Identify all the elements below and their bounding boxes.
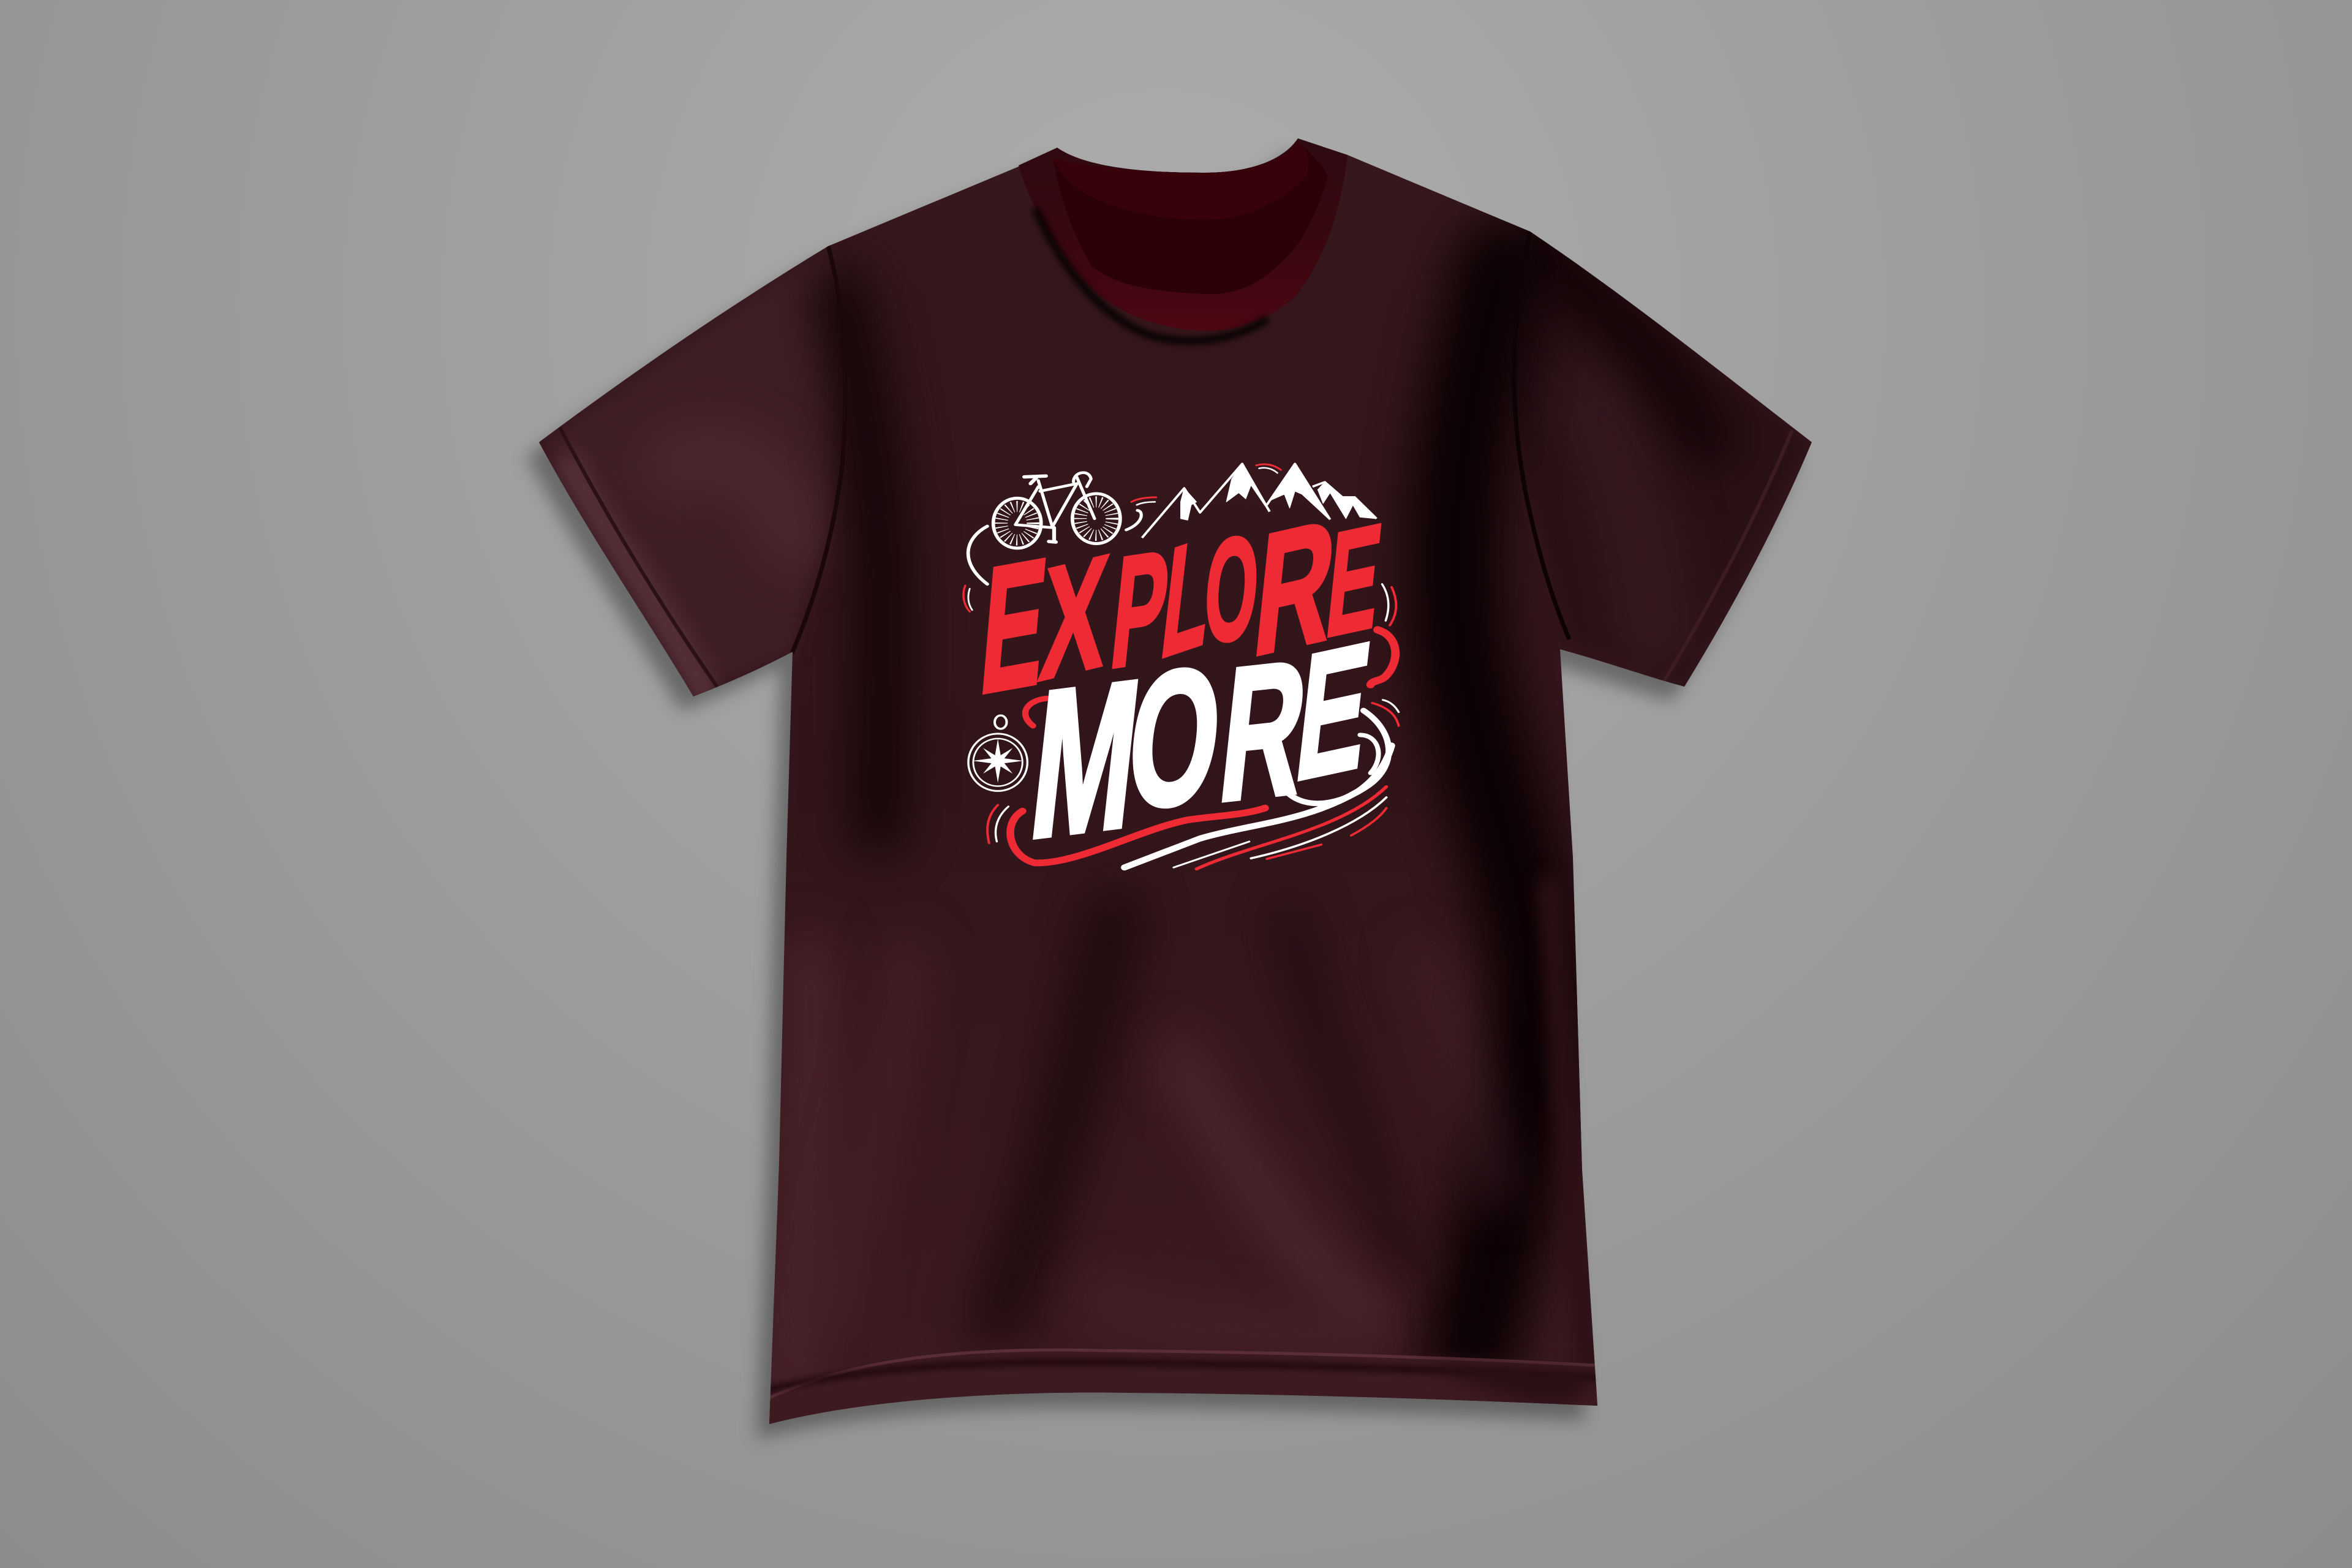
icon: compass — [968, 715, 1027, 791]
icon: bicycle — [993, 473, 1120, 548]
collar front edge shadow — [1035, 208, 1268, 341]
inside back neck — [1053, 142, 1328, 294]
heading: EXPLORE: E — [1320, 492, 1388, 669]
icon: mountains — [1142, 464, 1376, 538]
shirt base shape — [539, 138, 1812, 1424]
heading: EXPLORE: P — [1104, 517, 1176, 701]
decorative flourishes, red — [963, 464, 1399, 869]
back collar band — [1053, 142, 1308, 220]
heading: MORE: R — [1212, 621, 1316, 842]
heading: EXPLORE: E — [974, 520, 1054, 732]
heading: EXPLORE — [974, 483, 1388, 732]
heading: EXPLORE: O — [1199, 507, 1264, 672]
fabric shading and folds — [539, 232, 1812, 1433]
decorative flourishes, white — [968, 468, 1399, 867]
collar — [1019, 138, 1348, 341]
heading: EXPLORE: R — [1247, 483, 1343, 693]
t-shirt — [539, 138, 1812, 1433]
hem band — [769, 1352, 1597, 1424]
heading: EXPLORE: L — [1154, 502, 1220, 692]
left sleeve seam and hem — [793, 246, 845, 652]
heading: MORE: O — [1119, 628, 1231, 848]
collar ribbing — [1019, 138, 1348, 331]
right sleeve seam and hem — [1514, 232, 1569, 638]
heading: MORE: E — [1287, 605, 1379, 820]
heading: MORE — [1022, 605, 1379, 883]
shirt drop shadow — [527, 153, 1800, 1439]
chest print graphic — [963, 464, 1399, 883]
heading: MORE: M — [1022, 635, 1150, 883]
heading: EXPLORE: X — [1035, 521, 1114, 714]
